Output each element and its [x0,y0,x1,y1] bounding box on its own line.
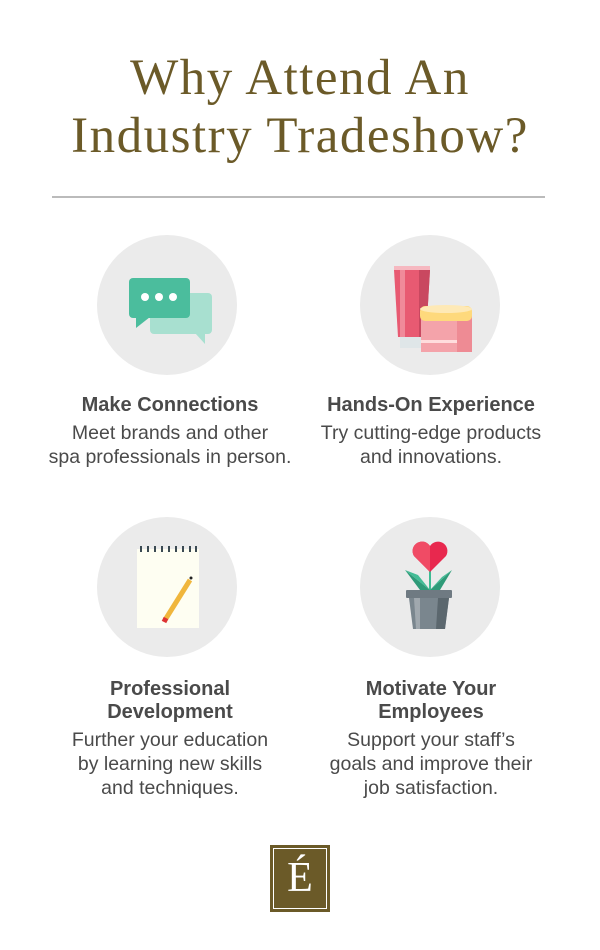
logo [270,845,330,912]
icon: heart plant [360,517,500,657]
text [49,422,291,468]
heading: Hands-On Experience [327,394,535,416]
panel: make connections [49,394,291,468]
heading: Make Connections [82,394,258,416]
text [330,729,532,799]
panel: hands-on [321,394,541,468]
text [321,422,541,468]
text: Try cutting-edge products [321,422,541,444]
logo: É [287,855,313,901]
heading: Development [107,701,233,723]
icon: notepad [97,517,237,657]
heading: Employees [378,701,484,723]
heading: Professional [110,678,230,700]
text: Meet brands and other [72,422,268,444]
heading: Motivate Your [366,678,496,700]
heading [107,678,233,723]
text: by learning new skills [78,753,262,775]
title [71,50,529,164]
heading [366,678,496,723]
text: job satisfaction. [364,777,498,799]
text [72,729,268,799]
text: Further your education [72,729,268,751]
text: and innovations. [360,446,502,468]
icon: chat bubbles [97,235,237,375]
panel: professional development [72,678,268,799]
text: Support your staff’s [347,729,515,751]
text: and techniques. [101,777,239,799]
title: Industry Tradeshow? [71,108,529,164]
icon: cosmetics [360,235,500,375]
text: goals and improve their [330,753,532,775]
panel: motivate employees [330,678,532,799]
text: spa professionals in person. [49,446,291,468]
title: Why Attend An [130,50,470,106]
